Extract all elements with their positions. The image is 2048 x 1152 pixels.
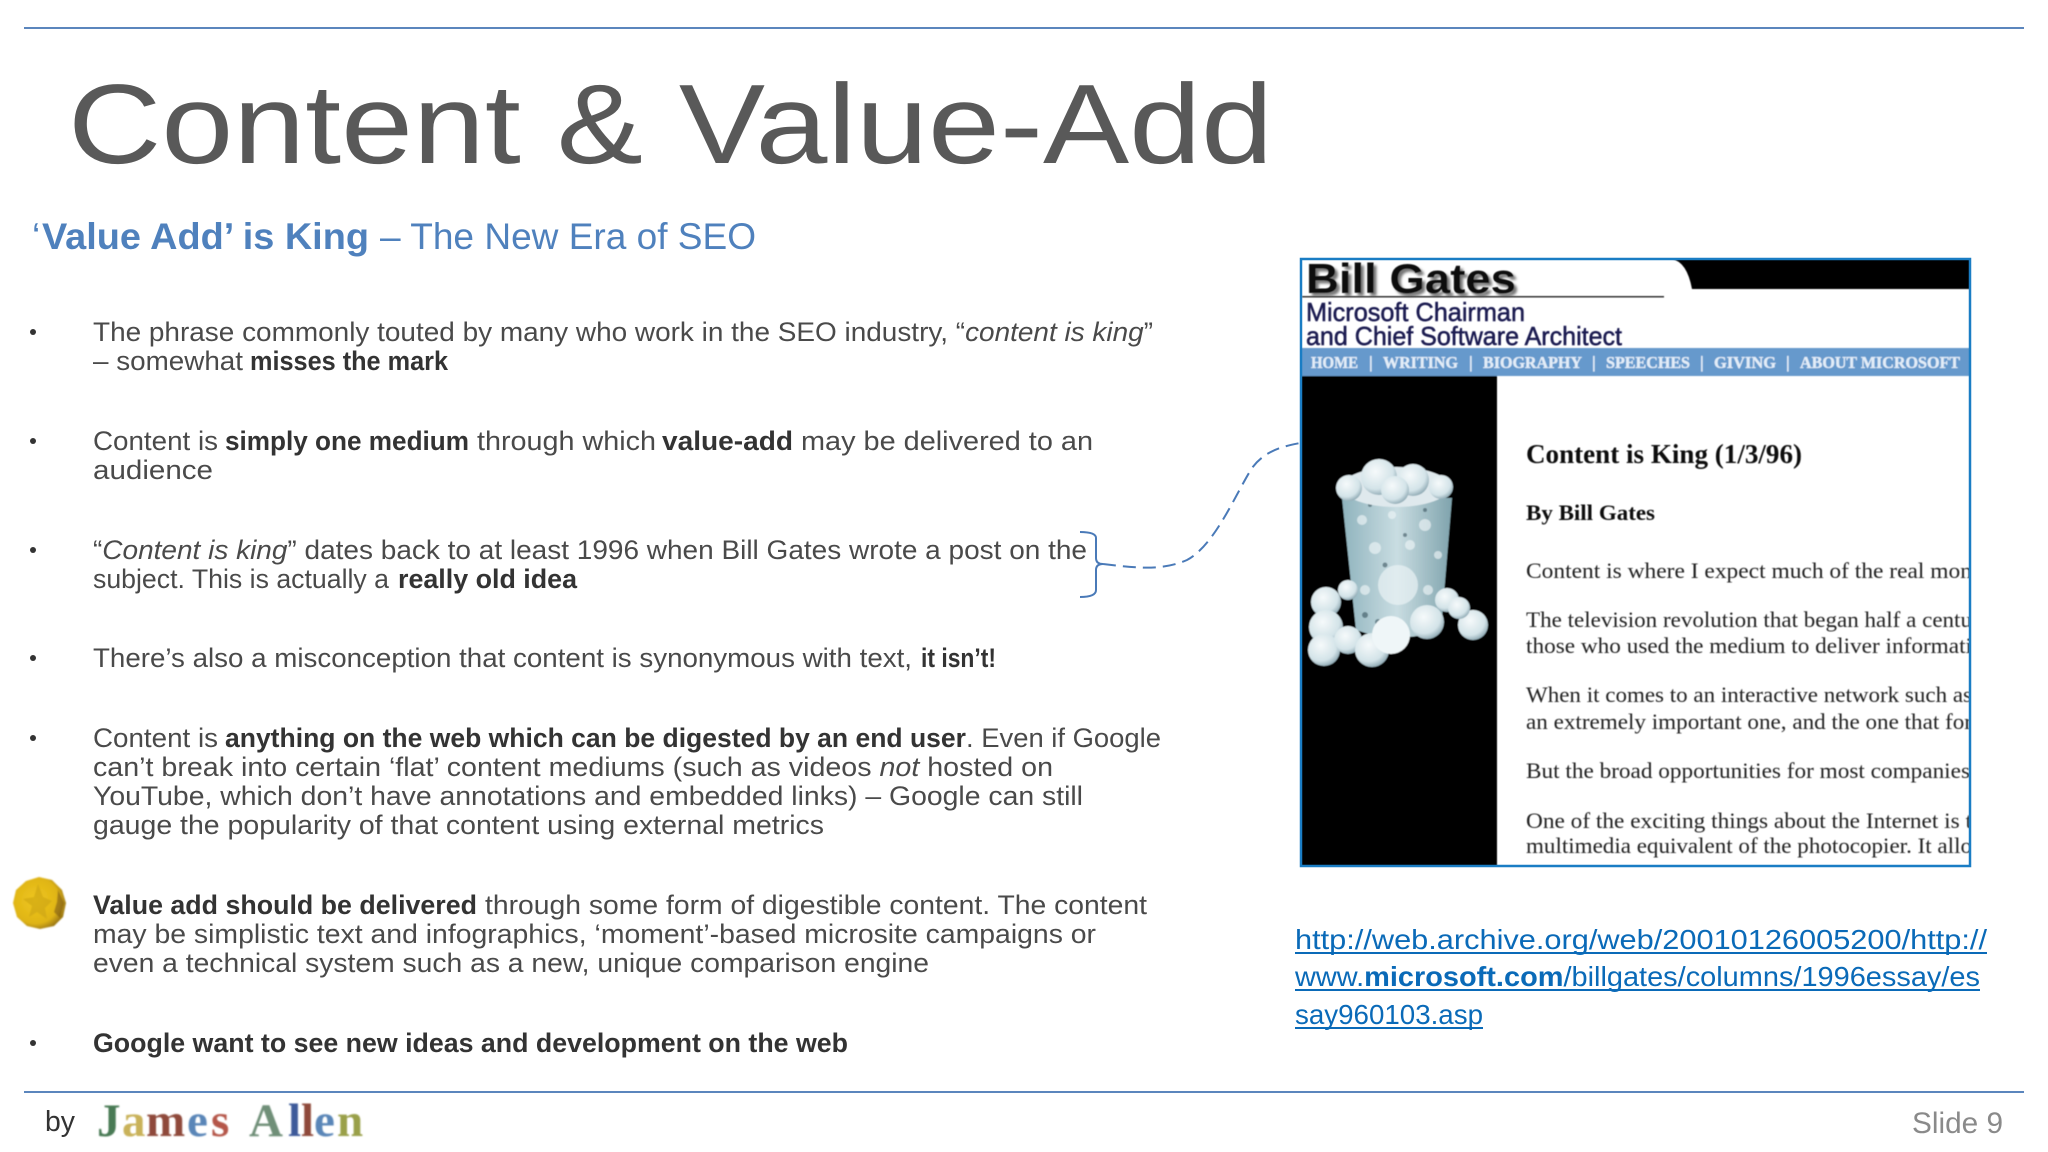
footer: James Allen logo: J — [97, 1095, 120, 1147]
article body text — [1526, 558, 1973, 858]
footer: James Allen logo: A — [249, 1095, 283, 1147]
navigation bar — [1301, 348, 1970, 376]
article body text: those who used the medium to deliver informati — [1526, 633, 1972, 658]
footer: James Allen logo: e — [314, 1095, 335, 1147]
bullet: one medium: may be delivered to an — [801, 426, 1093, 456]
bullet: one medium: simply one medium — [225, 426, 469, 456]
left black column — [1301, 376, 1497, 866]
bullet: 1996 Bill Gates: really old idea — [398, 564, 578, 594]
footer: James Allen logo: n — [337, 1095, 363, 1147]
bullet: anything digested: Content is — [93, 723, 218, 753]
panel: Bill Gates web page screenshot — [1301, 255, 1973, 866]
navigation bar: | — [1469, 353, 1473, 372]
bullet: value add delivered: through some form of digestible content. The content — [485, 890, 1148, 920]
subtitle — [32, 216, 756, 257]
top rule — [24, 27, 2024, 29]
bullet: 1996 Bill Gates: subject. This is actually a — [93, 564, 390, 594]
footer: James Allen logo: m — [146, 1095, 185, 1147]
navigation bar: | — [1786, 353, 1790, 372]
navigation bar: ABOUT MICROSOFT — [1800, 353, 1961, 372]
bullet: anything digested: YouTube, which don’t have annotations and embedded links) – Google can still — [93, 781, 1083, 811]
bullet: value add delivered: may be simplistic text and infographics, ‘moment’-based microsite campaigns or — [93, 919, 1096, 949]
bullet: one medium — [30, 426, 1093, 485]
bullet: misconception: it isn’t! — [921, 643, 996, 673]
arrow: dashed connector to screenshot — [1103, 443, 1300, 568]
subtitle: Value Add’ is King — [42, 216, 369, 257]
article body text: One of the exciting things about the Internet is t — [1526, 808, 1972, 833]
footer: James Allen logo: e — [187, 1095, 208, 1147]
footer: James Allen logo: a — [122, 1095, 146, 1147]
job title: and Chief Software Architect — [1306, 321, 1623, 351]
title: Content & Value-Add — [68, 61, 1273, 187]
footer: James Allen logo: l — [288, 1095, 301, 1147]
source link: www.microsoft.com/billgates/columns/1996essay/es — [1294, 961, 1980, 992]
bullet: one medium: through which — [477, 426, 656, 456]
bullet: value add delivered: even a technical system such as a new, unique comparison engine — [93, 948, 929, 978]
heading: Bill Gates: Bill Gates — [1306, 255, 1516, 302]
navigation bar: | — [1369, 353, 1373, 372]
bullet: one medium: Content is — [93, 426, 218, 456]
footer: James Allen logo — [97, 1095, 363, 1147]
footer: slide number: Slide 9 — [1912, 1107, 2003, 1140]
bullet: value add delivered: Value add should be delivered — [93, 890, 477, 920]
footer: James Allen logo: l — [301, 1095, 314, 1147]
article body text: an extremely important one, and the one that for — [1526, 709, 1973, 734]
bottom rule — [24, 1091, 2024, 1093]
bullet: anything digested — [30, 723, 1161, 840]
bullet: anything digested: . Even if Google — [966, 723, 1161, 753]
article heading — [1526, 439, 1802, 525]
navigation bar: GIVING — [1714, 353, 1776, 372]
heading: Bill Gates: Bill Gates — [1309, 258, 1519, 305]
bullet: anything digested: can’t break into certain ‘flat’ content mediums (such as videos not hosted on — [93, 752, 1053, 782]
header black bar — [1672, 259, 1970, 289]
subtitle: – The New Era of SEO — [380, 216, 756, 257]
article body text: The television revolution that began half a centu — [1526, 607, 1972, 632]
article body text: multimedia equivalent of the photocopier. It allo — [1526, 833, 1972, 858]
navigation bar: SPEECHES — [1606, 353, 1690, 372]
article heading: By Bill Gates — [1526, 500, 1655, 525]
article heading: Content is King (1/3/96) — [1526, 439, 1802, 469]
navigation bar: | — [1700, 353, 1704, 372]
navigation bar: HOME — [1311, 353, 1358, 372]
navigation bar: WRITING — [1383, 353, 1458, 372]
job title: Microsoft Chairman — [1306, 297, 1525, 327]
bullet: Google new ideas: Google want to see new ideas and development on the web — [93, 1028, 848, 1058]
bullet: content is king misses the mark: The phrase commonly touted by many who work in the SEO industry, “ content is king” — [93, 317, 1153, 347]
bullet: content is king misses the mark: misses the mark — [250, 346, 449, 376]
job title — [1306, 300, 1623, 346]
article body text: But the broad opportunities for most companies — [1526, 758, 1970, 783]
navigation bar: | — [1592, 353, 1596, 372]
source link — [1294, 924, 1987, 1030]
icon: gold coin bullet — [13, 877, 66, 929]
source link: say960103.asp — [1295, 999, 1483, 1030]
footer: by: by — [45, 1106, 75, 1138]
bullet: anything digested: anything on the web which can be digested by an end user — [225, 723, 966, 753]
article body text: Content is where I expect much of the real mon — [1526, 558, 1972, 583]
bullet: 1996 Bill Gates — [30, 535, 1087, 594]
bullet: one medium: audience — [93, 455, 213, 485]
bullet: one medium: value-add — [662, 426, 793, 456]
subtitle: ‘ — [32, 216, 40, 257]
bullet: content is king misses the mark — [30, 317, 1153, 376]
image: bucket of ice — [1308, 459, 1488, 667]
bullet: value add delivered — [93, 890, 1148, 978]
article body text: When it comes to an interactive network such as — [1526, 682, 1972, 707]
bullet: anything digested: gauge the popularity of that content using external metrics — [93, 810, 824, 840]
brace — [1080, 532, 1103, 597]
bullet: misconception: There’s also a misconception that content is synonymous with text, — [93, 643, 912, 673]
footer: James Allen logo: s — [211, 1095, 229, 1147]
navigation bar: BIOGRAPHY — [1483, 353, 1582, 372]
bullet: 1996 Bill Gates: “Content is king” dates back to at least 1996 when Bill Gates wrote a post on the — [93, 535, 1087, 565]
bullet: content is king misses the mark: – somewhat — [93, 346, 244, 376]
source link: http://web.archive.org/web/20010126005200/http:// — [1295, 924, 1987, 955]
